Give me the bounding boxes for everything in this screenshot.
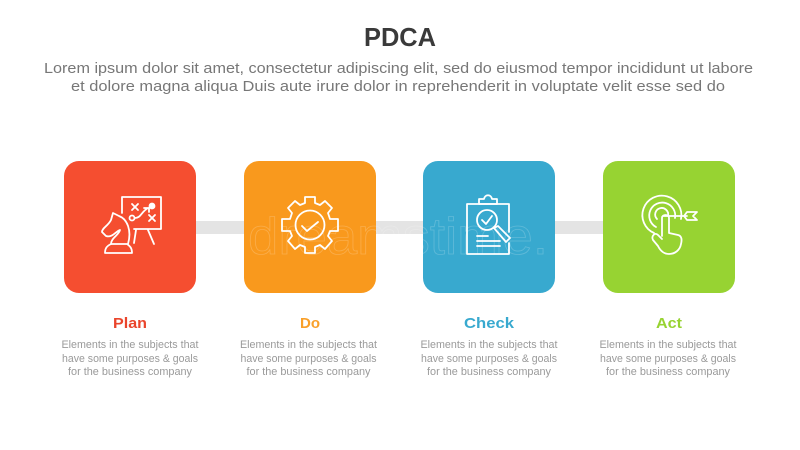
connector bar [190,221,610,234]
subtitle text: Lorem ipsum dolor sit amet, consectetur adipiscing elit, sed do eiusmod tempor incididunt ut labore [44,60,753,77]
icon: clipboard with magnifier [467,195,510,254]
panel: check [423,161,555,293]
do description: Elements in the subjects that [240,339,377,351]
label: act [600,315,736,378]
act description [600,339,736,378]
check description: Elements in the subjects that [420,339,558,351]
subtitle text [44,60,753,95]
panel: plan [64,161,196,293]
check description: have some purposes & goals [421,353,557,365]
label: check [420,315,558,378]
check heading: Check [464,315,515,332]
check description: for the business company [427,366,551,378]
watermark: dreamstime. [248,208,548,266]
do card [244,161,376,293]
label: do [240,315,377,378]
panel: act [603,161,735,293]
do description [240,339,377,378]
plan heading: Plan [113,315,147,332]
subtitle text: et dolore magna aliqua Duis aute irure dolor in reprehenderit in voluptate velit esse sed do [71,78,725,95]
icon: target with arrow and hand [642,196,697,254]
do description: have some purposes & goals [240,353,377,365]
plan description: have some purposes & goals [62,353,198,365]
icon: chess knight and strategy board [102,197,161,253]
panel: do [244,161,376,293]
plan card [64,161,196,293]
icon: gear with check [282,197,338,253]
plan description: for the business company [68,366,192,378]
plan description: Elements in the subjects that [62,339,198,351]
label: plan [62,315,198,378]
check card [423,161,555,293]
act description: Elements in the subjects that [600,339,736,351]
do description: for the business company [246,366,371,378]
act description: have some purposes & goals [600,353,736,365]
do heading: Do [300,315,320,332]
plan description [62,339,198,378]
act description: for the business company [606,366,730,378]
act card [603,161,735,293]
check description [420,339,558,378]
title: PDCA [364,22,436,52]
act heading: Act [656,315,682,332]
